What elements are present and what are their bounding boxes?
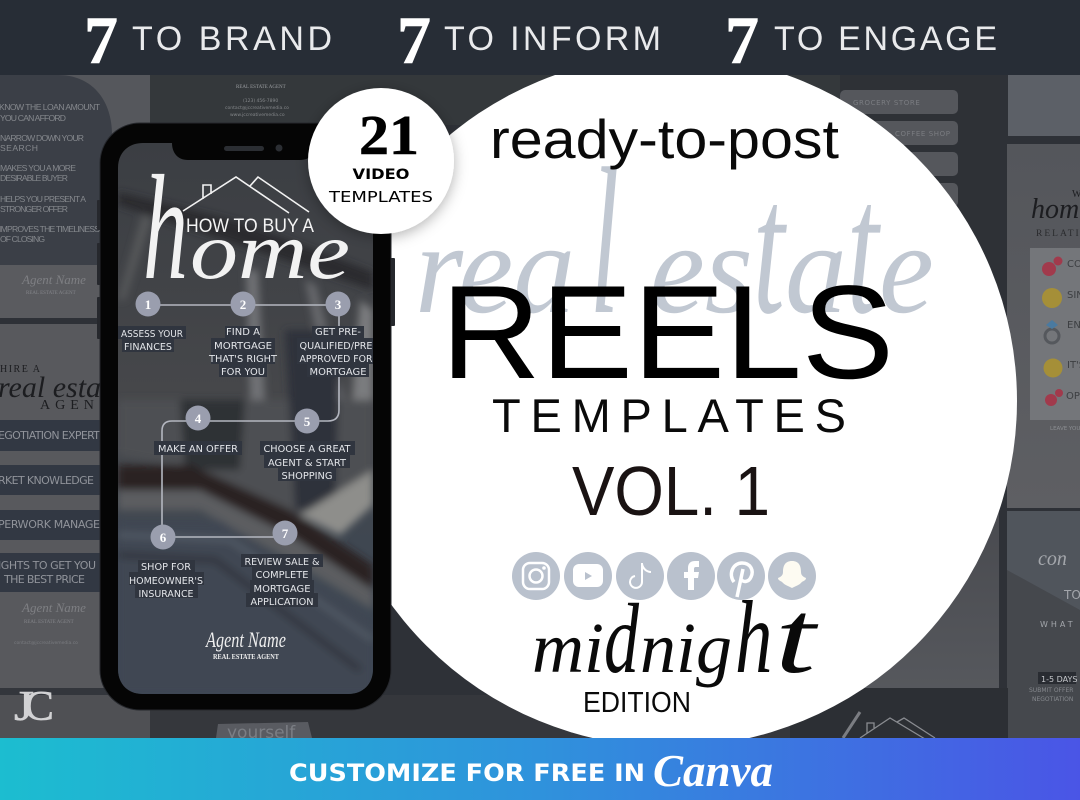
step 1: 1 [145,297,151,312]
step 3 [297,292,373,378]
step 3: QUALIFIED/PRE [300,341,372,352]
panel: loan amount template: SEARCH [0,143,38,153]
panel: loan amount template [0,75,150,318]
panel: places list template: GROCERY STORE [853,99,920,107]
step 3: 3 [335,297,342,312]
step 1: FINANCES [124,342,172,353]
step 6 [129,524,204,600]
text: EDITION: EDITION [583,687,691,719]
script: home: h [143,145,188,311]
panel: contract timeline template: con [1038,548,1067,570]
panel: hire a real estate agent template: PERWORK MANAGE [0,518,100,531]
panel: hire a real estate agent template: AGEN [40,398,99,413]
script heading: real estate: l [590,125,619,358]
heading: 7 to brand: TO BRAND [132,20,332,58]
panel: contract timeline template: 1-5 DAYS [1041,675,1077,684]
logo: JC: C [24,684,54,730]
script heading: real estate: e [879,197,934,341]
panel: loan amount template: NARROW DOWN YOUR [0,133,84,143]
step 6: SHOP FOR [141,562,191,573]
step 2: THAT'S RIGHT [208,354,278,365]
script heading: real estate [415,125,934,358]
icon: upside-down face [1042,288,1062,308]
phone mockup [97,123,395,710]
step 6: 6 [160,530,167,545]
heading: 7 to brand: 7 [84,2,118,78]
bottom call-to-action bar [0,738,1080,800]
subtitle: TEMPLATES: TEMPLATES [492,389,846,442]
icon: snapchat [768,552,816,600]
phone body [100,123,391,710]
script text: midnight: h [735,579,772,695]
panel: contact footer template [150,75,840,125]
panel: loan amount template: YOU CAN AFFORD [0,113,66,123]
step 2: FOR YOU [221,367,265,378]
script text: midnight: mi [532,608,604,688]
panel: hire a real estate agent template: RKET KNOWLEDGE [0,474,94,487]
step 4: MAKE AN OFFER [158,444,238,455]
heading: 7 to brand [84,2,332,78]
panel: hire a real estate agent template: contact@jccreativemedia.co [14,640,78,646]
agent name signature: REAL ESTATE AGENT [213,652,279,661]
subtitle: VOL. 1: VOL. 1 [572,452,770,530]
top header bar [0,0,1080,78]
panel: house logo template [790,688,1008,745]
script heading: real estate: t [847,142,881,353]
step connector lines [148,305,339,537]
icon: pinterest [717,552,765,600]
step 4 [154,406,242,455]
panel: bottom left template: yourself [227,723,296,743]
script heading: real estate: es [650,197,753,341]
step 6: HOMEOWNER'S [129,576,203,587]
heading: 7 to engage [725,2,997,78]
icon: hearts small [1045,389,1063,406]
panel: loan amount template: OF CLOSING [0,234,45,244]
panel: contact footer template: (123) 456-7890 [243,98,278,104]
step 4: 4 [195,411,202,426]
panel: contact footer template: REAL ESTATE AGENT [236,85,286,90]
phone screen photo [118,143,373,694]
script heading: real estate: t [753,142,787,353]
panel: places list template: COFFEE SHOP [895,130,951,138]
side buttons [97,200,395,339]
panel: loan amount template: REAL ESTATE AGENT [26,291,76,296]
panel: home relationship status template: LEAVE YOU [1050,426,1080,432]
panel: places list template [840,75,1000,395]
panel: contract timeline template: SUBMIT OFFER [1029,687,1073,694]
heading: 7 to inform: 7 [397,2,431,78]
script text: midnight: nig [640,608,732,688]
step 7: REVIEW SALE & [244,557,320,568]
script text: midnight: t [775,580,819,695]
panel: loan amount template: STRONGER OFFER [0,204,68,214]
icon: hearts [1042,256,1062,276]
panel: hire a real estate agent template [0,324,150,688]
step 7: COMPLETE [256,570,308,581]
heading: 7 to engage: 7 [725,2,759,78]
panel: home relationship status template: hom [1031,194,1079,225]
panel: grey lower template behind circle [790,380,999,688]
heading: 7 to inform: TO INFORM [444,20,661,58]
step 1 [118,292,186,353]
script: home: ome [190,207,350,296]
icon: facebook [667,552,715,600]
panel: hire a real estate agent template: IGHTS TO GET YOU [0,559,96,572]
text: HOW TO BUY A: HOW TO BUY A [186,216,314,237]
speaker and camera [224,144,282,152]
step 2 [208,292,278,378]
step 6: INSURANCE [138,589,194,600]
panel: contact footer template: www.jccreativemedia.co [230,112,285,118]
panel: hire a real estate agent template: Agent Name [21,600,86,615]
logo: JC: J [14,684,34,730]
step 7: APPLICATION [250,597,314,608]
step 3: APPROVED FOR [300,354,373,365]
step 5: CHOOSE A GREAT [264,444,351,455]
step 7 [241,520,323,608]
social media icons [512,552,816,600]
script text: midnight [532,579,819,695]
icon: ring [1045,320,1059,343]
panel: loan amount template: MAKES YOU A MORE [0,163,76,173]
panel: loan amount template: DESIRABLE BUYER [0,173,68,183]
step 5: 5 [304,414,311,429]
script heading: real estate: a [785,197,847,341]
panel: contract timeline template: WHAT [1040,620,1076,629]
text: customize for free in: CUSTOMIZE FOR FREE IN [289,759,645,787]
heading: 7 to inform [397,2,661,78]
panel: loan amount template: Agent Name [21,272,86,287]
icon: tiktok [616,552,664,600]
agent name signature: Agent Name [205,627,286,652]
panel: hire a real estate agent template: THE BEST PRICE [3,573,85,586]
panel: hire a real estate agent template: real esta [0,371,101,404]
badge: 21 video templates [308,88,454,234]
panel: loan amount template: HELPS YOU PRESENT A [0,194,86,204]
panel: hire a real estate agent template: HIRE A [0,364,42,375]
icon: house roof logo [183,177,309,213]
panel: home relationship status template: RELATI [1036,229,1080,239]
step 1: ASSESS YOUR [121,329,183,340]
script heading: real estate: rea [415,197,575,341]
step 7: 7 [282,526,289,541]
script: home [143,145,350,311]
step 2: MORTGAGE [214,341,272,352]
step 3: GET PRE- [315,327,361,338]
badge: 21 video templates: VIDEO [352,167,410,183]
heading: ready-to-post: ready-to-post [490,108,839,170]
step 5: AGENT & START [268,458,347,469]
step 2: 2 [240,297,246,312]
script text: midnight: d [604,583,640,694]
panel: loan amount template: KNOW THE LOAN AMOUNT [0,102,101,112]
step 7: MORTGAGE [254,584,310,595]
title: REELS: REELS [441,259,894,407]
panel: bottom left template [0,688,790,743]
panel: home relationship status template [1007,75,1080,508]
step 3: MORTGAGE [310,367,366,378]
icon: youtube [564,552,612,600]
icon: instagram [512,552,560,600]
text: Canva: Canva [653,745,773,796]
step 2: FIND A [226,327,260,338]
heading: 7 to engage: TO ENGAGE [774,20,997,58]
step 5: SHOPPING [282,471,332,482]
panel: hire a real estate agent template: EGOTIATION EXPERT [0,429,100,442]
panel: hire a real estate agent template: REAL ESTATE AGENT [24,620,74,625]
panel: home relationship status template: OP [1066,391,1080,402]
panel: contact footer template: contact@jccreativemedia.co [225,105,289,111]
panel: contract timeline template [1007,511,1080,738]
panel: loan amount template: IMPROVES THE TIMELINESS [0,224,100,234]
icon: neutral face [1044,358,1062,378]
white circle [392,75,1017,738]
step 5 [260,408,355,482]
agent name signature [205,627,286,661]
badge: 21 video templates: 21 [359,105,419,167]
panel: contract timeline template: NEGOTIATION [1032,696,1073,703]
badge: 21 video templates: TEMPLATES [328,188,433,206]
